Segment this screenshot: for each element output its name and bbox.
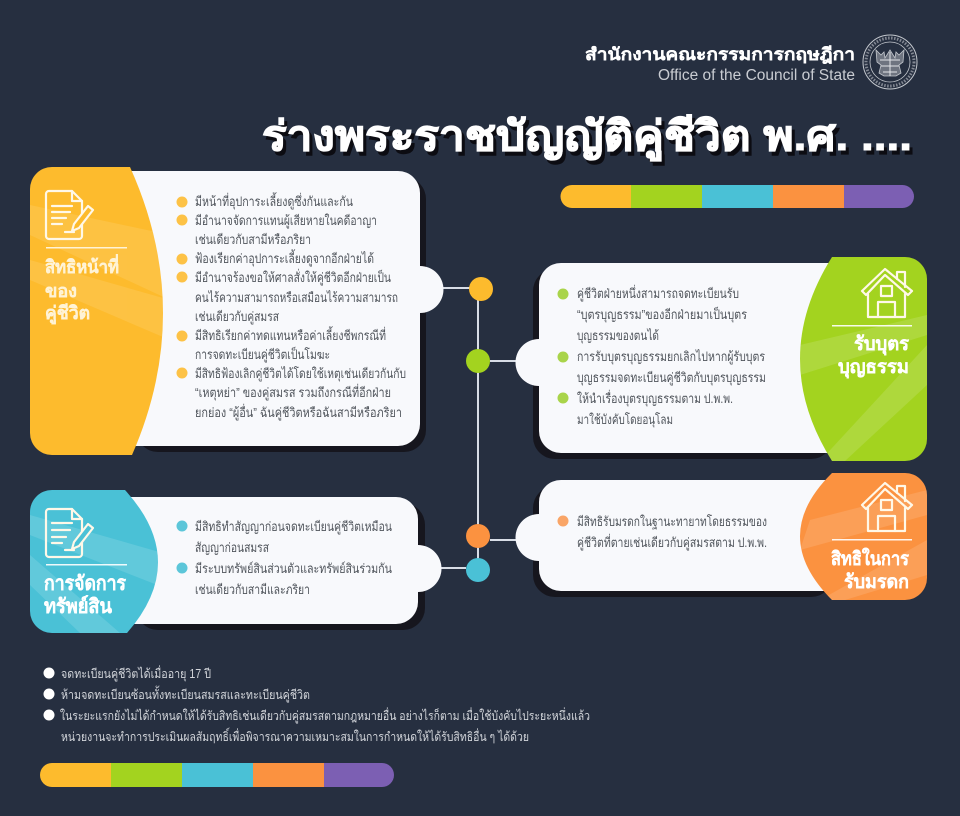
icon: document and pen bbox=[46, 191, 93, 239]
green label tab bbox=[800, 257, 927, 461]
label text bbox=[831, 547, 910, 593]
list text: คู่ชีวิตฝ่ายหนึ่งสามารถจดทะเบียนรับ bbox=[577, 285, 739, 302]
label text: คู่ชีวิต bbox=[45, 303, 90, 325]
header: organisation name bbox=[585, 44, 855, 84]
list text bbox=[195, 192, 406, 421]
list text: มีสิทธิเรียกค่าทดแทนหรือค่าเลี้ยงชีพกรณีที่ bbox=[195, 326, 386, 343]
list text: คู่ชีวิตที่ตายเช่นเดียวกับคู่สมรสตาม ป.พ.พ. bbox=[577, 534, 767, 551]
label text: ทรัพย์สิน bbox=[44, 595, 112, 618]
list text: มีหน้าที่อุปการะเลี้ยงดูซึ่งกันและกัน bbox=[195, 192, 353, 210]
colour bar: bottom bbox=[40, 763, 394, 787]
connector node: teal bbox=[466, 558, 490, 582]
title: ร่างพระราชบัญญัติคู่ชีวิต พ.ศ. .... bbox=[265, 117, 915, 166]
teal label tab bbox=[30, 490, 170, 633]
header: organisation name: Office of the Council of State bbox=[658, 67, 855, 84]
header: organisation name: สำนักงานคณะกรรมการกฤษฎีกา bbox=[585, 44, 855, 64]
label text bbox=[44, 573, 126, 618]
list text: ให้นำเรื่องบุตรบุญธรรมตาม ป.พ.พ. bbox=[577, 390, 733, 407]
list text bbox=[195, 519, 392, 597]
yellow label tab bbox=[30, 167, 170, 455]
panel: duties and rights bbox=[30, 167, 443, 455]
list text: มีสิทธิทำสัญญาก่อนจดทะเบียนคู่ชีวิตเหมือน bbox=[195, 519, 392, 535]
connector lines bbox=[439, 288, 516, 570]
bullet dots bbox=[176, 196, 188, 378]
bullet dots bbox=[176, 520, 188, 574]
footnotes bbox=[44, 665, 590, 744]
list text: บุญธรรมของตนได้ bbox=[577, 328, 659, 344]
list text: ฟ้องเรียกค่าอุปการะเลี้ยงดูจากอีกฝ่ายได้ bbox=[195, 249, 374, 267]
connector node: orange bbox=[466, 524, 490, 548]
list text: มีสิทธิฟ้องเลิกคู่ชีวิตได้โดยใช้เหตุเช่นเดียวกันกับ bbox=[195, 366, 406, 382]
icon: house bbox=[862, 269, 912, 317]
label text: ของ bbox=[45, 281, 77, 301]
bullet dots bbox=[558, 288, 568, 404]
label text bbox=[838, 334, 910, 379]
list text: “บุตรบุญธรรม”ของอีกฝ่ายมาเป็นบุตร bbox=[577, 305, 747, 323]
panel: property management bbox=[30, 490, 441, 633]
label text: การจัดการ bbox=[44, 573, 126, 595]
list text: มาใช้บังคับโดยอนุโลม bbox=[577, 412, 673, 428]
list text: มีอำนาจจัดการแทนผู้เสียหายในคดีอาญา bbox=[195, 213, 377, 229]
list text bbox=[577, 514, 767, 551]
colour bar: top bbox=[560, 185, 914, 208]
label divider bbox=[46, 247, 127, 248]
footnotes: ในระยะแรกยังไม่ได้กำหนดให้ได้รับสิทธิเช่นเดียวกับคู่สมรสตามกฎหมายอื่น อย่างไรก็ตาม เมื่อใช้บังคับไประยะหนึ่งแล้ว bbox=[60, 707, 590, 724]
orange label tab bbox=[800, 473, 927, 600]
icon: council seal bbox=[863, 35, 917, 89]
icon: house bbox=[862, 483, 912, 531]
label text bbox=[45, 254, 119, 325]
label text: รับมรดก bbox=[844, 572, 909, 593]
title: ร่างพระราชบัญญัติคู่ชีวิต พ.ศ. .... bbox=[262, 113, 912, 162]
list text: เช่นเดียวกับสามีหรือภริยา bbox=[195, 232, 311, 247]
connector node: green bbox=[466, 349, 490, 373]
label text: บุญธรรม bbox=[838, 357, 909, 379]
list text: มีอำนาจร้องขอให้ศาลสั่งให้คู่ชีวิตอีกฝ่ายเป็น bbox=[195, 268, 391, 286]
list text: การจดทะเบียนคู่ชีวิตเป็นโมฆะ bbox=[195, 345, 330, 363]
panel: child adoption bbox=[515, 257, 927, 461]
list text: สัญญาก่อนสมรส bbox=[195, 540, 269, 555]
list text bbox=[577, 285, 766, 428]
panel: inheritance bbox=[515, 473, 927, 600]
list text: ยกย่อง “ผู้อื่น” ฉันคู่ชีวิตหรือฉันสามีหรือภริยา bbox=[195, 404, 402, 421]
connector node: yellow bbox=[469, 277, 493, 301]
label divider bbox=[46, 564, 127, 566]
label divider bbox=[832, 539, 912, 540]
icon: document and pen bbox=[46, 509, 93, 557]
label text: สิทธิหน้าที่ bbox=[45, 254, 119, 277]
list text: เช่นเดียวกับสามีและภริยา bbox=[195, 582, 310, 597]
list text: มีสิทธิรับมรดกในฐานะทายาทโดยธรรมของ bbox=[577, 514, 767, 530]
list text: บุญธรรมจดทะเบียนคู่ชีวิตกับบุตรบุญธรรม bbox=[577, 370, 766, 386]
list text: เช่นเดียวกับคู่สมรส bbox=[195, 309, 279, 325]
label text: สิทธิในการ bbox=[831, 547, 910, 570]
footnotes: ห้ามจดทะเบียนซ้อนทั้งทะเบียนสมรสและทะเบียนคู่ชีวิต bbox=[61, 685, 310, 703]
bullet dot bbox=[558, 516, 568, 526]
label divider bbox=[832, 325, 912, 326]
list text: มีระบบทรัพย์สินส่วนตัวและทรัพย์สินร่วมกัน bbox=[195, 561, 392, 576]
label text: รับบุตร bbox=[854, 334, 910, 356]
list text: “เหตุหย่า” ของคู่สมรส รวมถึงกรณีที่อีกฝ่าย bbox=[195, 384, 391, 401]
list text: คนไร้ความสามารถหรือเสมือนไร้ความสามารถ bbox=[195, 290, 398, 305]
list text: การรับบุตรบุญธรรมยกเลิกไปหากผู้รับบุตร bbox=[577, 349, 765, 365]
footnotes: จดทะเบียนคู่ชีวิตได้เมื่ออายุ 17 ปี bbox=[61, 665, 211, 682]
footnotes: หน่วยงานจะทำการประเมินผลสัมฤทธิ์เพื่อพิจารณาความเหมาะสมในการกำหนดให้ได้รับสิทธิอื่น ๆ ได้ด้วย bbox=[61, 727, 529, 744]
